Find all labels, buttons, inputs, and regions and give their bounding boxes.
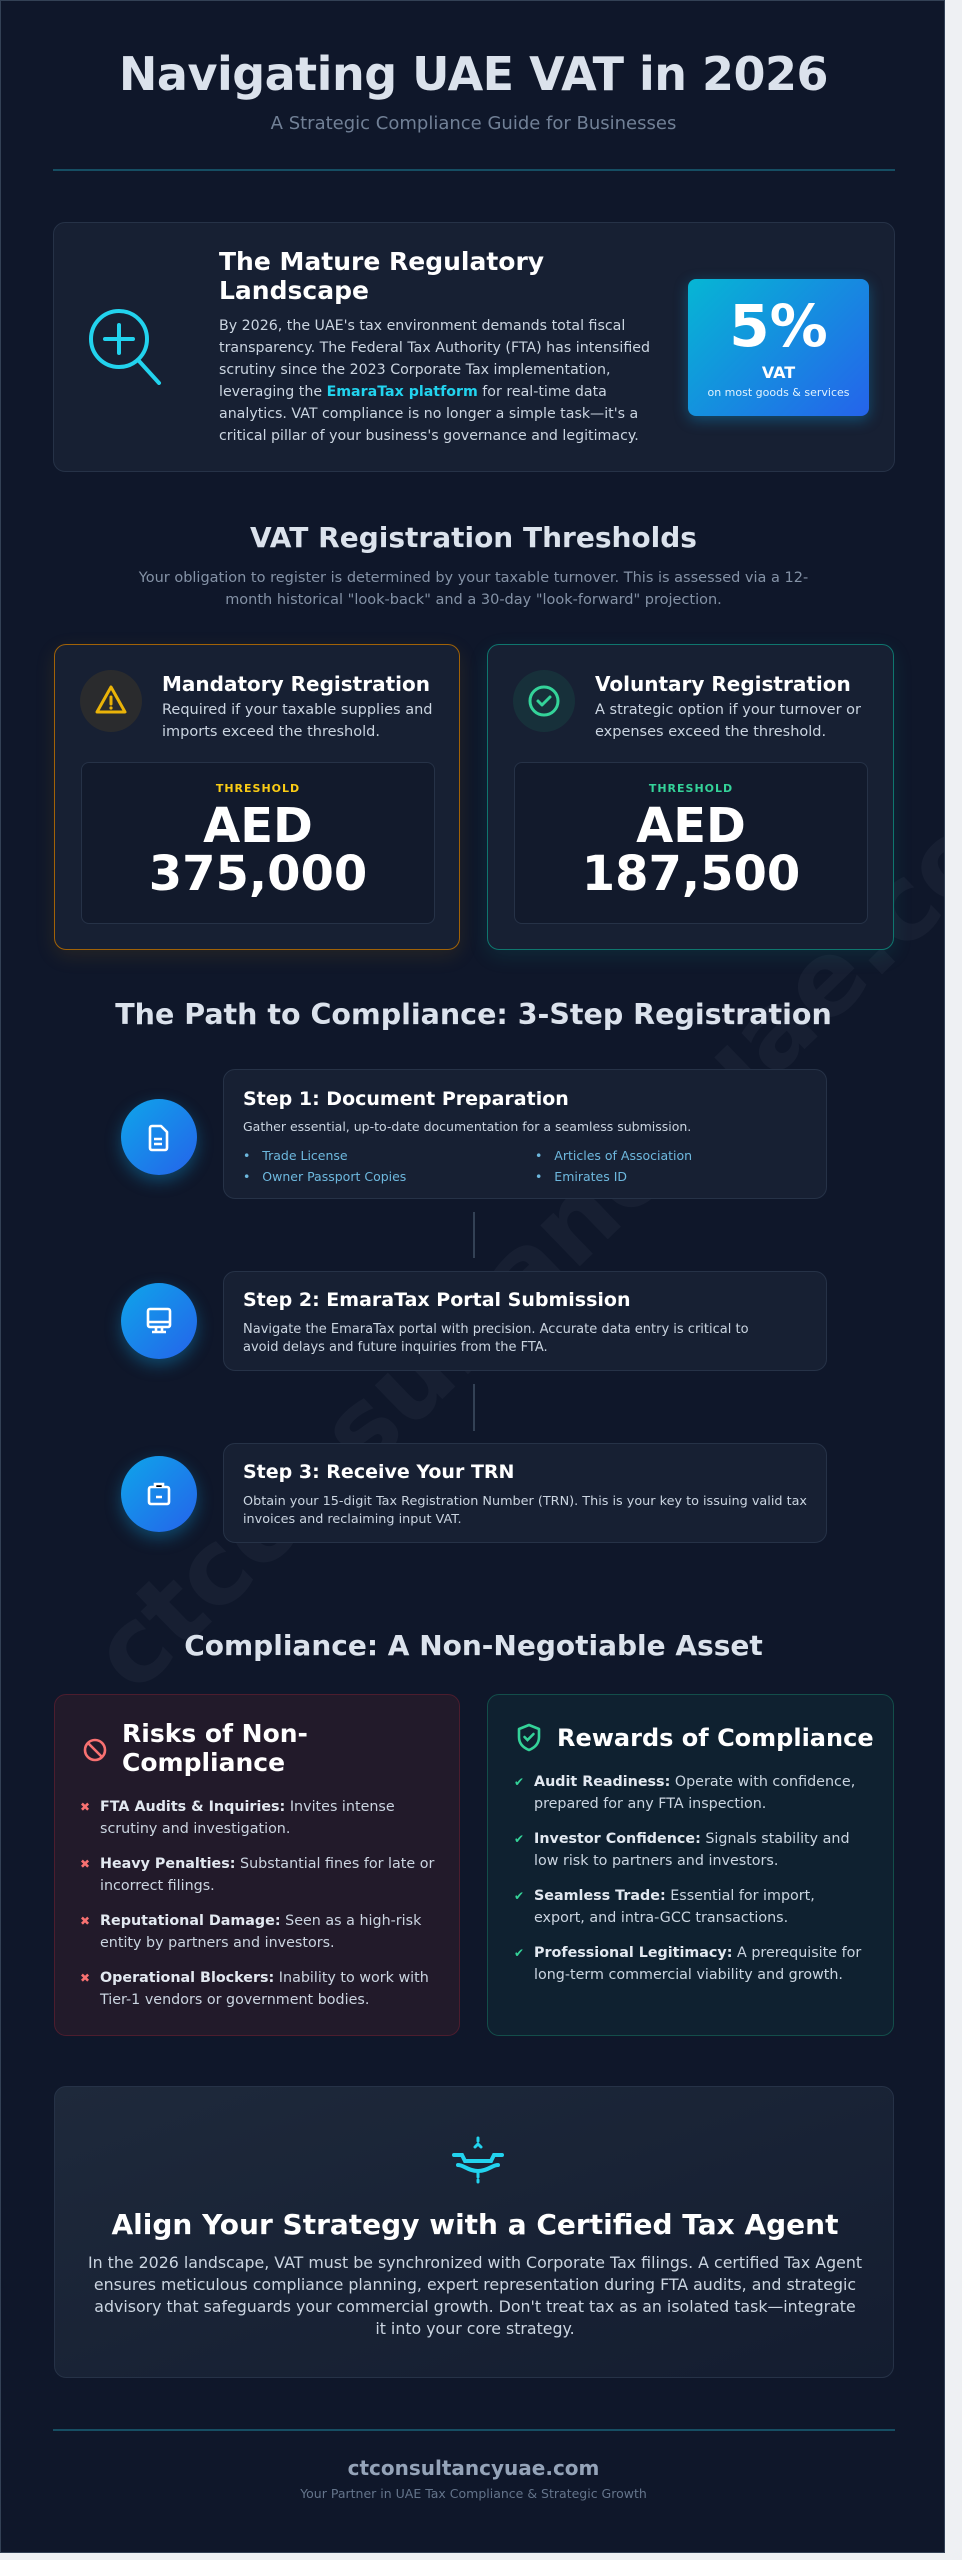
body text: In the 2026 landscape, VAT must be synchronized with Corporate Tax filings. A certified Tax Agent ensures meticulous compliance planning, expert representation during FTA audits, and strategic advisory that safeguards your commercial growth. Don't treat tax as an isolated task—integrate it into your core strategy. [88, 2253, 862, 2338]
list: risks: ✖ [80, 1800, 90, 1814]
text: thresholds intro: Your obligation to register is determined by your taxable turnover. This is assessed via a 12-month historical "look-back" and a 30-day "look-forward" projection. [139, 570, 808, 608]
list: rewards [514, 1774, 862, 1983]
subtitle: A Strategic Compliance Guide for Businesses [271, 113, 676, 134]
connector line [473, 1212, 475, 1258]
threshold value: THRESHOLD [649, 782, 733, 795]
threshold value: AED [203, 798, 313, 854]
heading: compliance: Compliance: A Non-Negotiable Asset [184, 1629, 763, 1662]
list: rewards: Investor Confidence: Signals stability and low risk to partners and investors. [534, 1831, 850, 1869]
threshold value [514, 762, 868, 924]
footer: website: ctconsultancyuae.com [348, 2456, 599, 2480]
step 1: • Trade License [243, 1148, 348, 1163]
list: risks: ✖ [80, 1914, 90, 1928]
list: rewards: ✔ [514, 1946, 524, 1960]
list: rewards: Seamless Trade: Essential for import, export, and intra-GCC transactions. [534, 1888, 815, 1926]
step 3: Obtain your 15-digit Tax Registration Number (TRN). This is your key to issuing valid tax invoices and reclaiming input VAT. [243, 1494, 807, 1527]
heading: The Mature Regulatory Landscape [219, 247, 544, 305]
list: rewards: Professional Legitimacy: A prerequisite for long-term commercial viability and growth. [534, 1945, 861, 1983]
heading: Risks of Non-Compliance [122, 1719, 308, 1777]
threshold value: AED [636, 798, 746, 854]
icon: id badge [121, 1456, 197, 1532]
text: Required if your taxable supplies and imports exceed the threshold. [162, 702, 432, 740]
heading: Align Your Strategy with a Certified Tax Agent [112, 2208, 838, 2241]
heading: Voluntary Registration [595, 672, 851, 696]
panel: voluntary [487, 644, 894, 950]
step 1: Gather essential, up-to-date documentation for a seamless submission. [243, 1119, 691, 1134]
icon: warning [80, 670, 142, 732]
list: risks: FTA Audits & Inquiries: Invites intense scrutiny and investigation. [100, 1799, 395, 1837]
callout: 5% VAT: VAT [762, 363, 795, 382]
icon: handshake [452, 2136, 504, 2184]
threshold value: 375,000 [149, 846, 367, 902]
callout: 5% VAT [688, 279, 869, 416]
icon: monitor [121, 1283, 197, 1359]
step 2: Step 2: EmaraTax Portal Submission [243, 1289, 631, 1311]
step 2 [113, 1271, 827, 1373]
footer: tagline: Your Partner in UAE Tax Compliance & Strategic Growth [300, 2486, 647, 2501]
panel: mandatory [54, 644, 460, 950]
step 3: Step 3: Receive Your TRN [243, 1461, 514, 1483]
panel: rewards [487, 1694, 894, 2036]
panel: risks [54, 1694, 460, 2036]
step 1: Step 1: Document Preparation [243, 1088, 569, 1110]
list: rewards: Audit Readiness: Operate with confidence, prepared for any FTA inspection. [534, 1774, 855, 1812]
step 2: Navigate the EmaraTax portal with precision. Accurate data entry is critical to avoid delays and future inquiries from the FTA. [243, 1322, 749, 1355]
list: rewards: ✔ [514, 1832, 524, 1846]
panel: regulatory landscape [53, 222, 895, 472]
panel: call to action [54, 2086, 894, 2378]
icon: prohibited [84, 1738, 106, 1762]
threshold value: 187,500 [582, 846, 800, 902]
step 1 [113, 1069, 827, 1199]
list: risks: ✖ [80, 1857, 90, 1871]
callout: 5% VAT: 5% [729, 292, 828, 360]
list: risks: Operational Blockers: Inability to work with Tier-1 vendors or government bodies. [100, 1970, 429, 2008]
body text: By 2026, the UAE's tax environment demands total fiscal transparency. The Federal Tax Authority (FTA) has intensified scrutiny since the 2023 Corporate Tax implementation, leveraging the EmaraTax platform for real-time data analytics. VAT compliance is no longer a simple task—it's a critical pillar of your business's governance and legitimacy. [219, 318, 650, 444]
list: risks [80, 1799, 434, 2008]
step 1: • Owner Passport Copies [243, 1169, 406, 1184]
heading: Rewards of Compliance [557, 1724, 874, 1752]
list: rewards: ✔ [514, 1889, 524, 1903]
icon: magnifier [89, 309, 162, 385]
list: risks: Reputational Damage: Seen as a high-risk entity by partners and investors. [100, 1913, 421, 1951]
list: risks: Heavy Penalties: Substantial fines for late or incorrect filings. [100, 1856, 434, 1894]
heading: thresholds: VAT Registration Thresholds [250, 521, 697, 554]
heading: path to compliance: The Path to Compliance: 3-Step Registration [115, 998, 832, 1031]
list: risks: ✖ [80, 1971, 90, 1985]
icon: shield [518, 1724, 540, 1752]
list: rewards: ✔ [514, 1775, 524, 1789]
step 3 [113, 1443, 827, 1546]
text: A strategic option if your turnover or expenses exceed the threshold. [595, 702, 861, 740]
threshold value [81, 762, 435, 924]
step 1: • Emirates ID [535, 1169, 627, 1184]
title: Navigating UAE VAT in 2026 [119, 47, 828, 101]
connector line [473, 1384, 475, 1431]
step 1: • Articles of Association [535, 1148, 692, 1163]
heading: Mandatory Registration [162, 672, 430, 696]
icon: document [121, 1099, 197, 1175]
threshold value: THRESHOLD [216, 782, 300, 795]
icon: check [513, 670, 575, 732]
callout: 5% VAT: on most goods & services [707, 386, 850, 399]
